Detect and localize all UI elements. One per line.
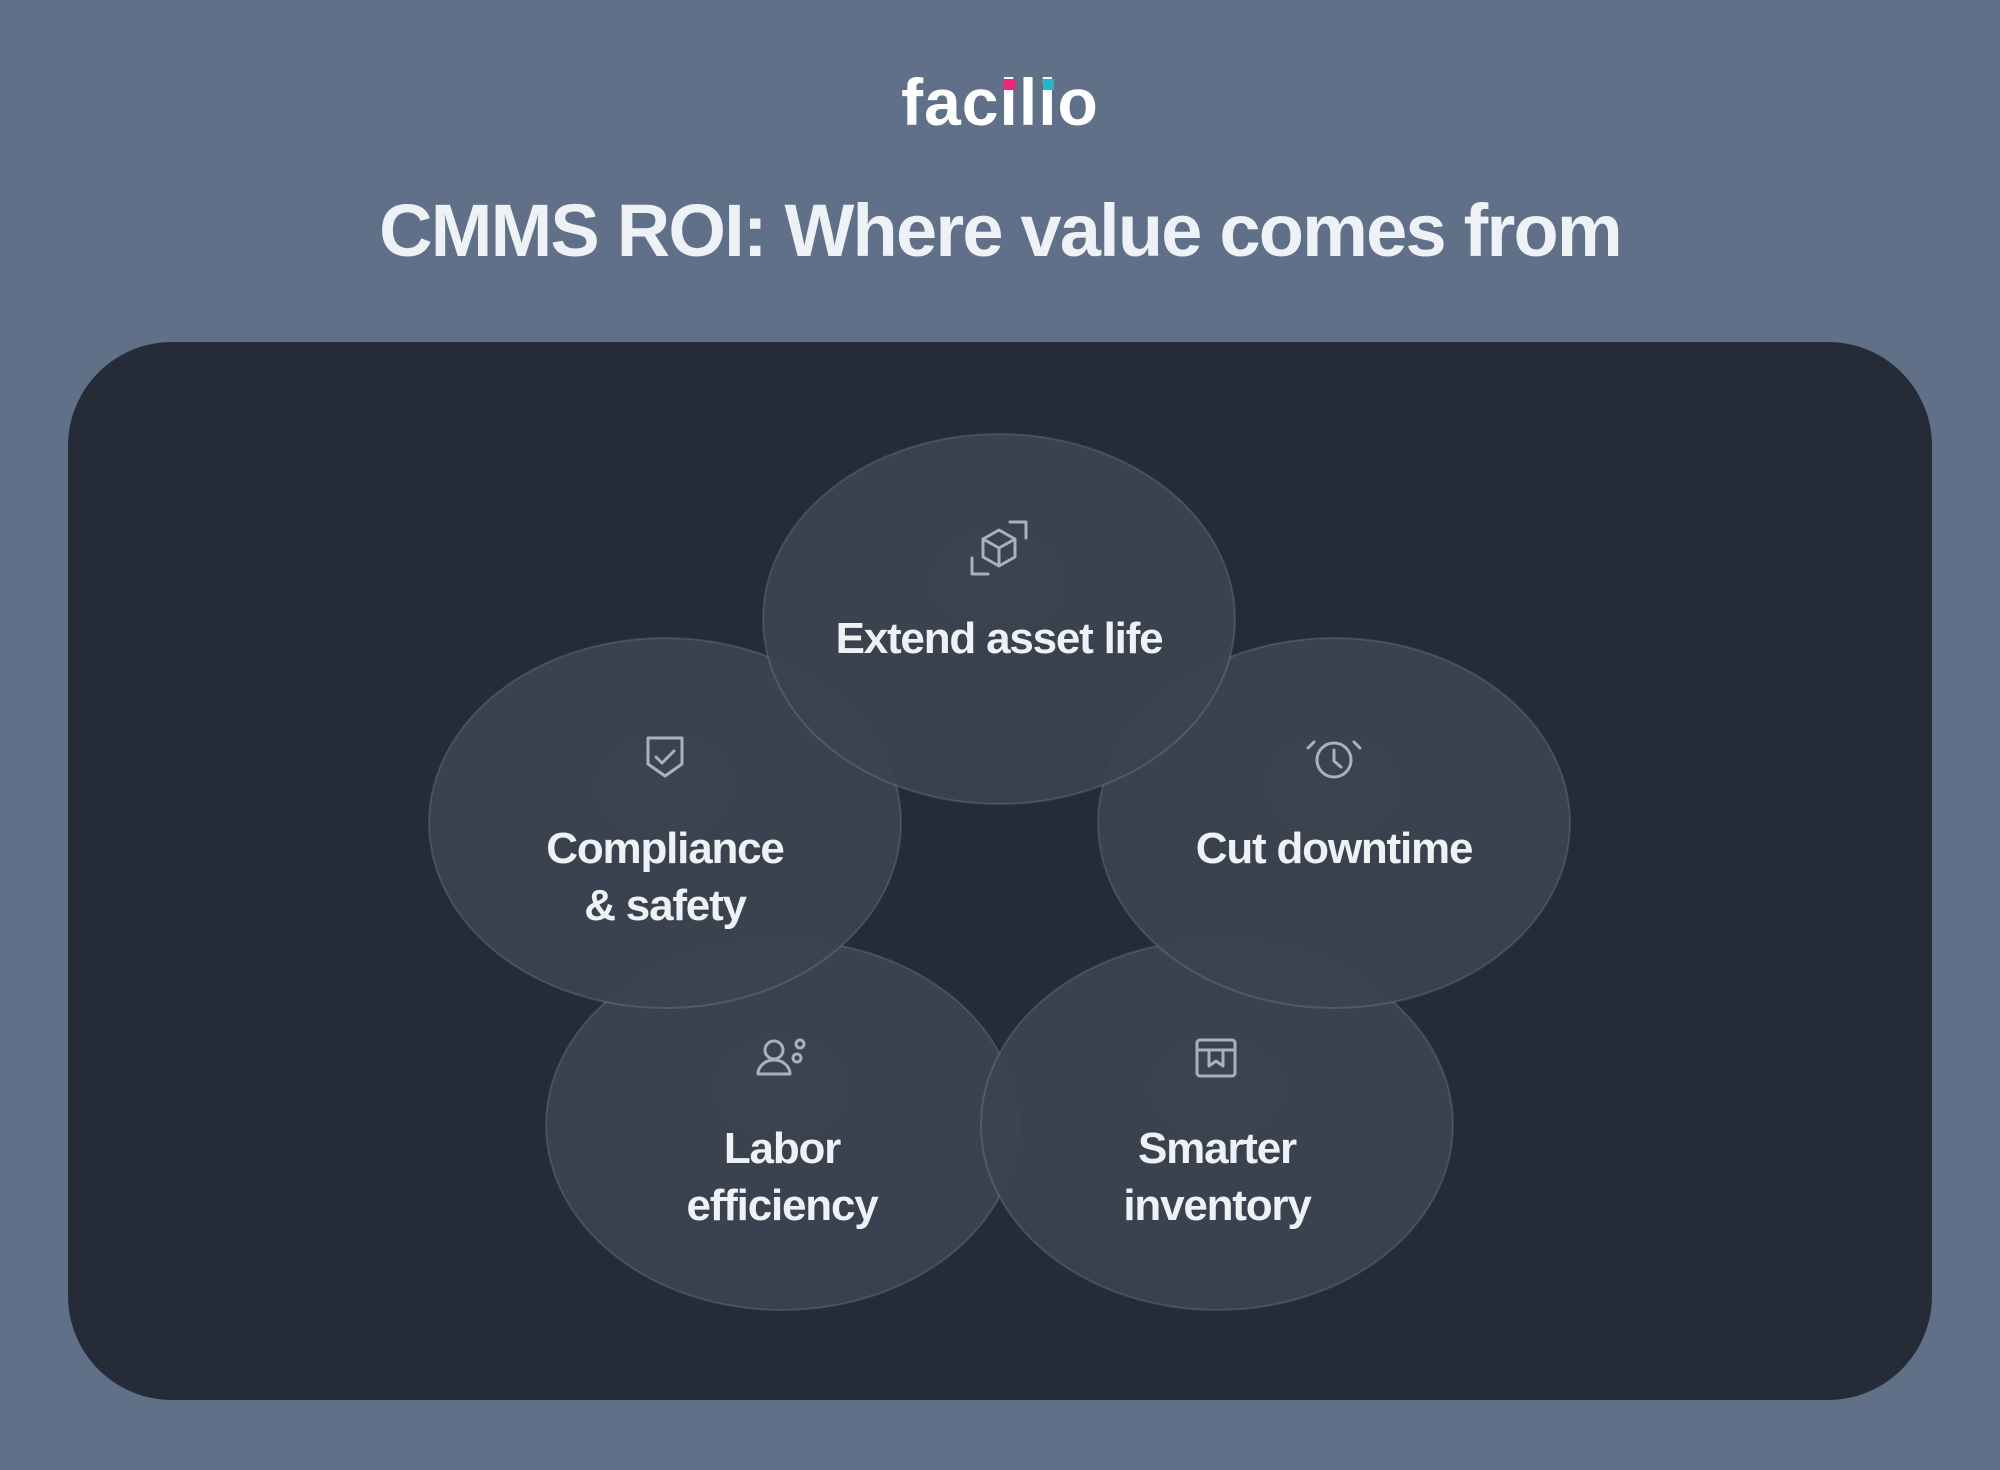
icon: inventory box bbox=[1197, 1040, 1235, 1076]
ellipse: labor bbox=[546, 940, 1018, 1310]
label: labor: Labor bbox=[724, 1124, 840, 1173]
label: compliance: Compliance bbox=[546, 824, 784, 873]
label: downtime: Cut downtime bbox=[1196, 824, 1472, 873]
label: asset life: Extend asset life bbox=[836, 614, 1162, 663]
ellipse: compliance bbox=[429, 638, 901, 1008]
ellipse: asset life bbox=[763, 434, 1235, 804]
label: compliance: & safety bbox=[584, 881, 748, 930]
ellipse: inventory bbox=[981, 940, 1453, 1310]
icon: clock bbox=[1308, 742, 1360, 777]
icon: shield bbox=[648, 738, 682, 776]
panel: diagram bbox=[68, 342, 1932, 1400]
label: inventory: Smarter bbox=[1138, 1124, 1296, 1173]
title: CMMS ROI: Where value comes from bbox=[379, 189, 1621, 272]
icon: worker bbox=[758, 1040, 804, 1074]
label: inventory: inventory bbox=[1123, 1181, 1312, 1230]
ellipse: downtime bbox=[1098, 638, 1570, 1008]
logo: facilio bbox=[901, 65, 1099, 139]
label: labor: efficiency bbox=[686, 1181, 879, 1230]
icon: cube bbox=[972, 522, 1026, 574]
